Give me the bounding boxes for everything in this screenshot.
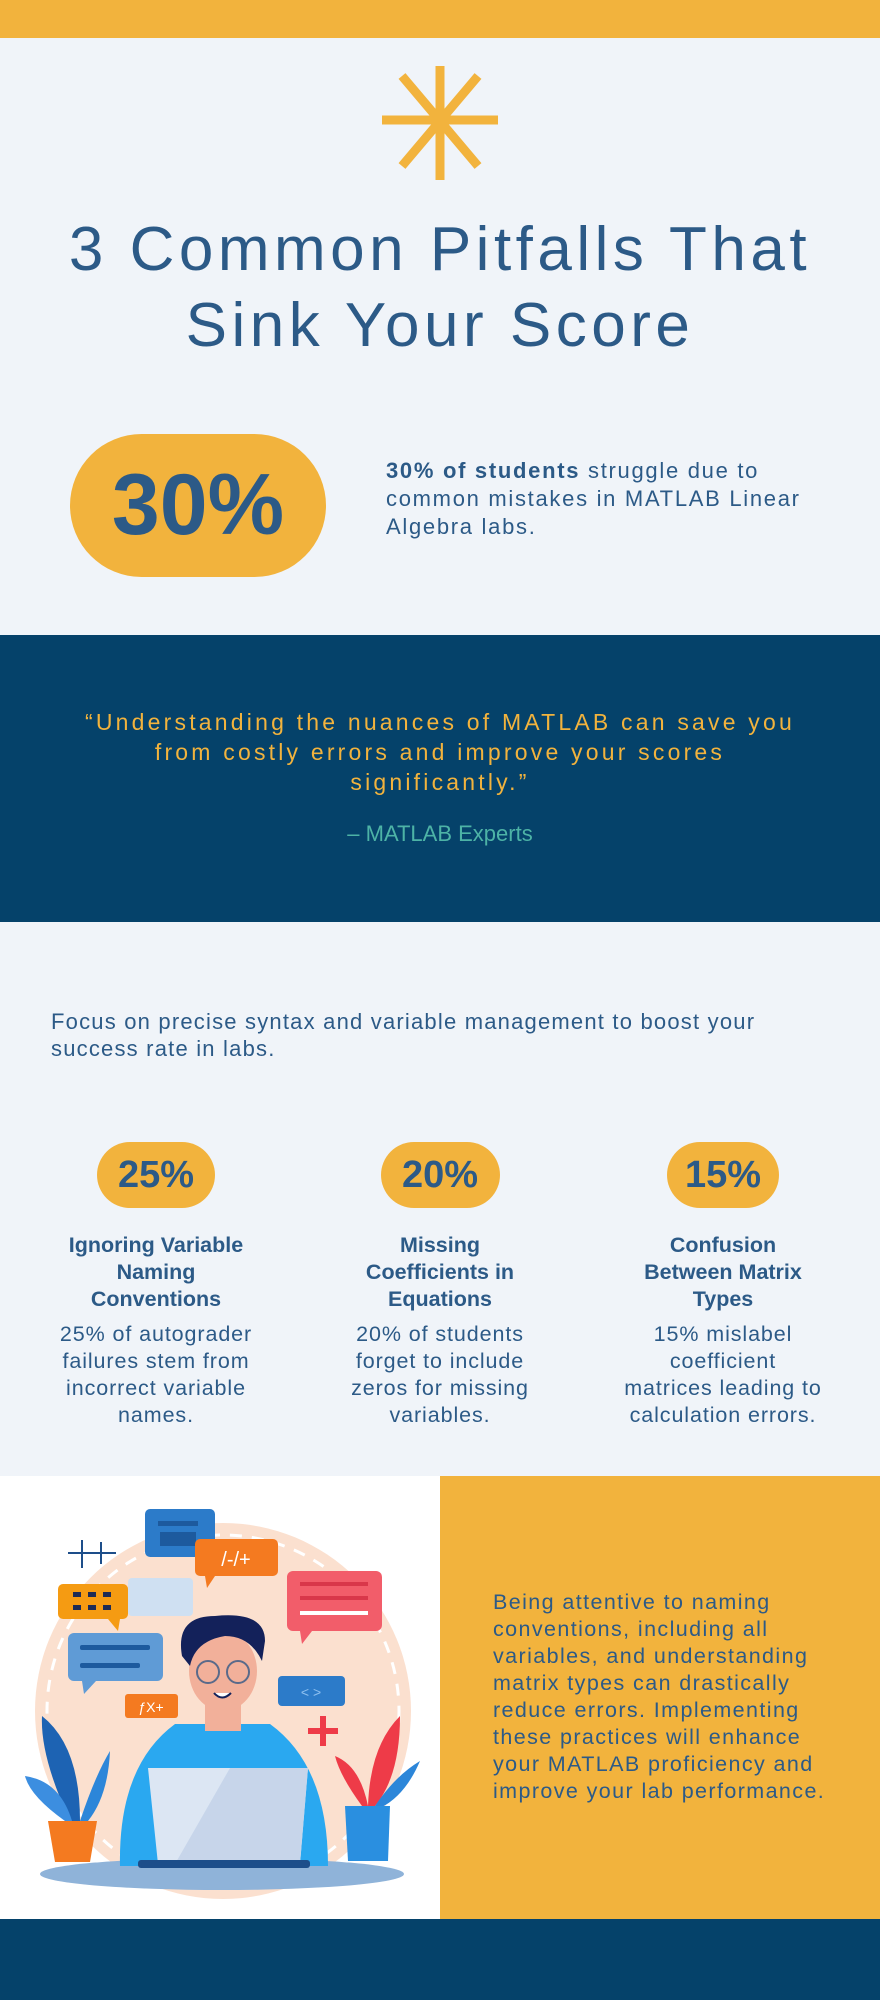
column 2: Coefficients in [366, 1260, 514, 1284]
summary text: reduce errors. Implementing [493, 1698, 800, 1722]
intro text: success rate in labs. [51, 1036, 276, 1061]
stat text: common mistakes in MATLAB Linear [386, 486, 801, 511]
icon: axes [68, 1540, 116, 1568]
pill 15% [667, 1142, 779, 1208]
top bar [0, 0, 880, 38]
summary text: Being attentive to naming [493, 1590, 771, 1614]
column 3: calculation errors. [630, 1403, 816, 1427]
illustration panel [0, 1476, 440, 1919]
icon: right plant [335, 1716, 420, 1861]
column 1: incorrect variable [66, 1376, 246, 1400]
summary text: variables, and understanding [493, 1644, 808, 1668]
column 1: names. [118, 1403, 194, 1427]
icon: left plant [25, 1716, 110, 1862]
icon: orange dots bubble [58, 1584, 128, 1631]
column 1: failures stem from [62, 1349, 250, 1373]
quote text: “Understanding the nuances of MATLAB can save you [85, 709, 795, 735]
column 3: matrices leading to [624, 1376, 822, 1400]
yellow summary panel [440, 1476, 880, 1920]
icon: blue bubble [68, 1633, 163, 1694]
column 1: Conventions [91, 1287, 221, 1311]
summary text: your MATLAB proficiency and [493, 1752, 814, 1776]
summary text: matrix types can drastically [493, 1671, 790, 1695]
column 1: Ignoring Variable [69, 1233, 243, 1257]
column 2: forget to include [356, 1349, 524, 1373]
stat text: 30% of students struggle due to [386, 458, 759, 483]
icon: plus signs [308, 1716, 338, 1746]
column 3: coefficient [670, 1349, 776, 1373]
pill 25% [97, 1142, 215, 1208]
stat pill 30% [70, 434, 326, 577]
column 1: 25% of autograder [60, 1322, 252, 1346]
stat text [386, 458, 801, 539]
column 1 [60, 1142, 252, 1427]
summary text [493, 1590, 825, 1803]
quote text: significantly.” [350, 769, 530, 795]
column 3: 15% mislabel [654, 1322, 792, 1346]
icon: fx bubble: ƒX+ [138, 1699, 164, 1715]
column 2: Equations [388, 1287, 492, 1311]
pill 20% [380, 1142, 500, 1208]
quote band [0, 635, 880, 922]
column 3: Types [693, 1287, 753, 1311]
icon: arrows badge: < > [301, 1684, 321, 1700]
title [69, 215, 811, 360]
bottom band [0, 1919, 880, 2000]
summary text: these practices will enhance [493, 1725, 801, 1749]
column 2: variables. [389, 1403, 490, 1427]
title: 3 Common Pitfalls That [69, 215, 811, 284]
column 2: zeros for missing [351, 1376, 529, 1400]
stat text: Algebra labs. [386, 514, 537, 539]
summary text: conventions, including all [493, 1617, 768, 1641]
intro text [51, 1009, 755, 1061]
pill 25%: 25% [118, 1154, 194, 1196]
icon: fx bubble [125, 1694, 178, 1718]
quote text: from costly errors and improve your scores [155, 739, 725, 765]
icon: calendar bubble [145, 1509, 215, 1557]
icon: arrows badge [278, 1676, 345, 1706]
icon: red bubble [287, 1571, 382, 1644]
icon: orange ops bubble: /-/+ [221, 1549, 251, 1571]
column 1: Naming [117, 1260, 195, 1284]
summary text: improve your lab performance. [493, 1779, 825, 1803]
intro text: Focus on precise syntax and variable management to boost your [51, 1009, 755, 1034]
stat pill 30%: 30% [112, 457, 284, 553]
icon: desk [40, 1858, 404, 1890]
icon: light blue bubble [128, 1578, 193, 1616]
column 2 [351, 1142, 529, 1427]
column 2: Missing [400, 1233, 480, 1257]
icon: orange ops bubble [195, 1539, 278, 1588]
column 3: Confusion [670, 1233, 776, 1257]
person [120, 1615, 328, 1866]
icon: laptop [138, 1768, 310, 1868]
quote text [85, 709, 795, 795]
title: Sink Your Score [186, 291, 694, 360]
column 3: Between Matrix [644, 1260, 802, 1284]
icon: asterisk [382, 66, 498, 180]
pill 20%: 20% [402, 1154, 478, 1196]
column 3 [624, 1142, 822, 1427]
column 2: 20% of students [356, 1322, 524, 1346]
pill 15%: 15% [685, 1154, 761, 1196]
quote attribution: – MATLAB Experts [347, 821, 533, 846]
